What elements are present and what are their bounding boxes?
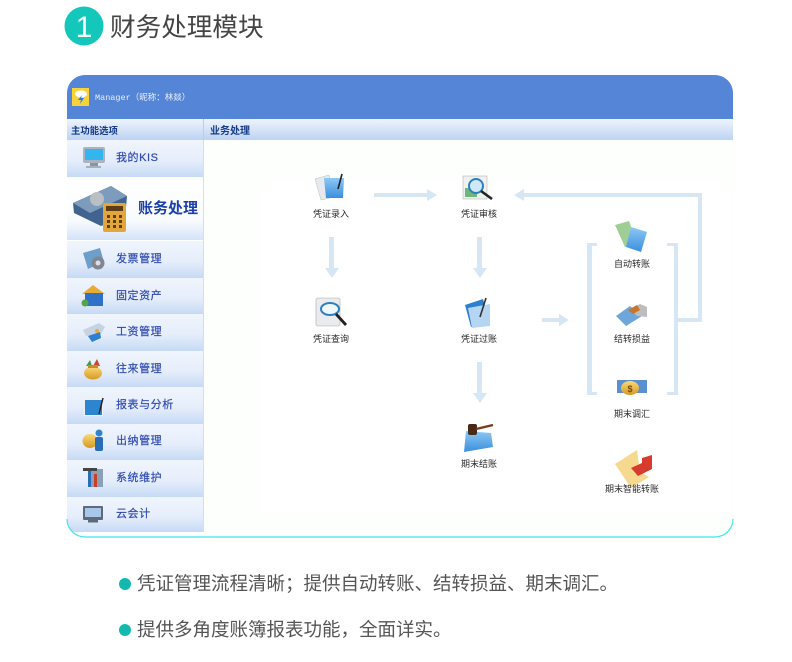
node: 凭证审核: 凭证审核: [461, 208, 497, 219]
window header bar: [67, 75, 733, 119]
node: 自动转账: 自动转账: [614, 258, 650, 269]
icon: number badge: 1: [76, 11, 92, 44]
menu item: 系统维护: [67, 460, 203, 497]
menu item: 出纳管理: [67, 424, 203, 460]
node: 期末智能转账: [605, 450, 659, 494]
menu item: 工资管理: [67, 314, 203, 351]
menu item: 工资管理: 工资管理: [116, 324, 162, 338]
bracket: left: [587, 243, 597, 395]
node: 期末结账: [461, 424, 497, 469]
arrow: entry to review: [374, 189, 437, 201]
node: 凭证查询: [313, 298, 349, 344]
node: 期末调汇: [614, 380, 650, 419]
node: 结转损益: 结转损益: [614, 333, 650, 344]
app name: Manager（昵称：林燚）: [95, 92, 190, 103]
menu item: 发票管理: 发票管理: [116, 251, 162, 265]
node: 期末智能转账: 期末智能转账: [605, 483, 659, 494]
menu item: 报表与分析: [67, 387, 203, 424]
node: 期末调汇: 期末调汇: [614, 408, 650, 419]
sub header right: 业务处理: [210, 124, 250, 137]
title: [64, 6, 264, 46]
node: 期末调汇: $: [627, 384, 633, 394]
node: 凭证查询: 凭证查询: [313, 333, 349, 344]
menu item: 往来管理: [67, 351, 203, 387]
sub header left: [67, 119, 203, 140]
node: 凭证过账: 凭证过账: [461, 333, 497, 344]
menu item: 我的KIS: [67, 140, 203, 177]
node: 凭证过账: [461, 298, 497, 344]
bullet 1: 凭证管理流程清晰；提供自动转账、结转损益、期末调汇。: [137, 573, 618, 594]
arrow: posting to closing: [473, 362, 487, 403]
panel: software screenshot: [67, 75, 733, 537]
node: 结转损益: [614, 304, 650, 344]
sub header left: 主功能选项: [71, 125, 119, 136]
menu item: 系统维护: 系统维护: [116, 470, 162, 484]
menu item: 发票管理: [67, 241, 203, 278]
menu item: 固定资产: 固定资产: [116, 288, 162, 302]
arrow: posting to transfers: [542, 314, 569, 326]
node: 凭证审核: [461, 176, 497, 219]
arrow: entry to query: [325, 237, 339, 278]
menu item: 报表与分析: 报表与分析: [116, 397, 174, 411]
menu item: 云会计: [67, 497, 203, 532]
menu item: 账务处理 active: [67, 186, 203, 240]
heading text: 财务处理模块: [110, 13, 264, 42]
icon: app logo: [72, 88, 89, 106]
panel: sidebar menu: [67, 140, 204, 532]
bracket: right: [667, 243, 678, 395]
menu item: 我的KIS: 我的KIS: [116, 150, 158, 164]
node: 期末结账: 期末结账: [461, 458, 497, 469]
icon: number badge: [64, 6, 104, 46]
panel outline: [67, 519, 733, 537]
node: 自动转账: [614, 221, 650, 269]
sub header right: [203, 119, 733, 140]
menu item: 云会计: 云会计: [116, 507, 151, 520]
bullet 2: 提供多角度账簿报表功能，全面详实。: [137, 619, 452, 640]
menu item: 固定资产: [67, 278, 203, 314]
node: 凭证录入: [313, 174, 349, 219]
menu item: 出纳管理: 出纳管理: [116, 433, 162, 447]
menu item: 往来管理: 往来管理: [116, 361, 162, 375]
menu item: 账务处理 active: 账务处理: [138, 199, 198, 217]
arrow: feedback loop: [514, 189, 702, 322]
bullet list: [119, 573, 618, 640]
node: 凭证录入: 凭证录入: [313, 208, 349, 219]
flow diagram: [313, 174, 702, 494]
arrow: review to posting: [473, 237, 487, 278]
